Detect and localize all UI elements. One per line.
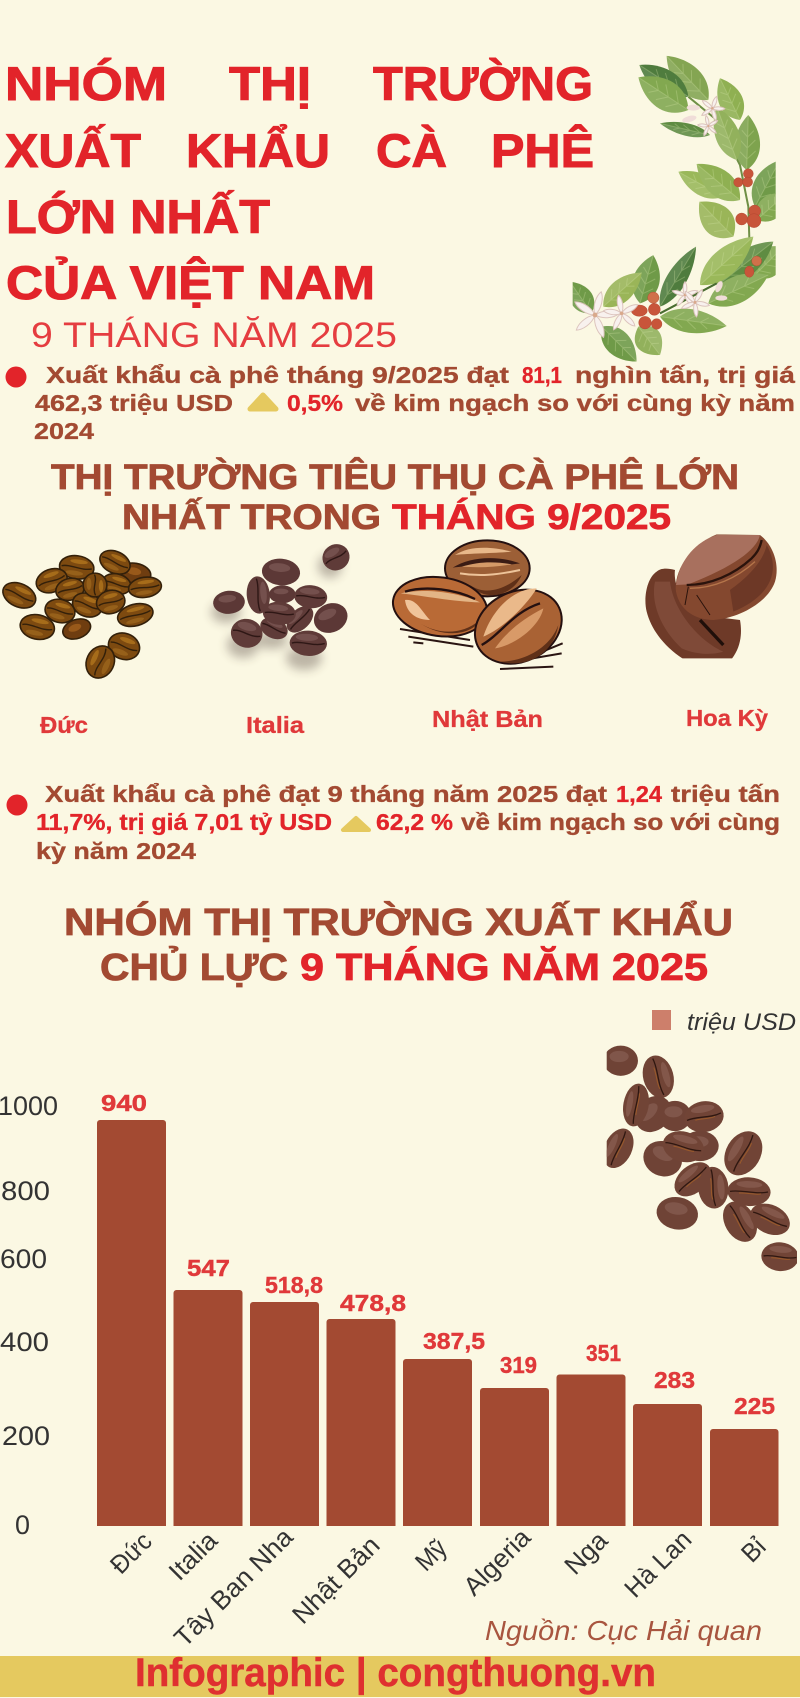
- legend: triệu USD: [687, 1009, 796, 1036]
- source note: Nguồn: Cục Hải quan: [485, 1615, 762, 1646]
- y axis labels: 800: [1, 1176, 50, 1206]
- subtitle: 9 THÁNG NĂM 2025: [31, 316, 397, 355]
- y axis labels: 600: [0, 1244, 47, 1274]
- x axis labels: Bỉ: [735, 1531, 772, 1568]
- x axis labels: Hà Lan: [618, 1524, 697, 1603]
- illustration: golden coffee beans (Đức): [0, 546, 163, 683]
- paragraph: september export summary: 0,5%: [287, 390, 343, 416]
- bullet: [6, 794, 28, 816]
- heading: main export markets: 9 THÁNG NĂM 2025: [300, 945, 708, 989]
- paragraph: nine month export summary: [6, 781, 780, 864]
- market labels: Đức: [40, 712, 88, 738]
- heading: main export markets: NHÓM THỊ TRƯỜNG XUẤT KHẨU: [64, 899, 733, 944]
- value labels: [101, 1090, 775, 1419]
- paragraph: nine month export summary: kỳ năm 2024: [36, 838, 196, 864]
- heading: largest consumer markets: [51, 457, 739, 537]
- paragraph: september export summary: 462,3 triệu USD: [35, 390, 233, 416]
- icon: up triangle: [250, 395, 276, 409]
- title: THỊ: [229, 57, 311, 110]
- paragraph: september export summary: Xuất khẩu cà phê tháng 9/2025 đạt: [46, 362, 509, 388]
- paragraph: nine month export summary: 62,2 %: [376, 809, 453, 835]
- illustration: dark coffee beans (Italia): [211, 539, 354, 670]
- title: KHẨU: [186, 124, 330, 177]
- market labels: [40, 705, 768, 738]
- x axis labels: Tây Ban Nha: [168, 1521, 299, 1653]
- title: CỦA VIỆT NAM: [6, 256, 375, 309]
- market labels: Italia: [246, 712, 304, 738]
- illustration: scattered coffee beans: [597, 1046, 800, 1273]
- paragraph: nine month export summary: 1,24: [616, 781, 662, 807]
- illustration: coffee branch wreath: [572, 56, 776, 362]
- value labels: 478,8: [340, 1290, 406, 1316]
- x axis labels: Italia: [162, 1525, 224, 1586]
- bars: [97, 1120, 778, 1526]
- heading: main export markets: [64, 899, 733, 989]
- value labels: 351: [586, 1340, 621, 1366]
- paragraph: september export summary: 81,1: [522, 362, 562, 388]
- heading: largest consumer markets: THÁNG 9/2025: [392, 497, 671, 537]
- paragraph: september export summary: về kim ngạch so với cùng kỳ năm: [355, 390, 795, 416]
- title: XUẤT: [5, 124, 141, 177]
- x axis labels: Nga: [558, 1525, 614, 1580]
- title: PHÊ: [491, 124, 594, 177]
- x axis labels: [104, 1521, 772, 1653]
- paragraph: september export summary: [6, 362, 796, 444]
- illustration: sketched coffee beans (Nhật Bản): [389, 540, 574, 677]
- paragraph: nine month export summary: triệu tấn: [671, 781, 780, 807]
- heading: largest consumer markets: THỊ TRƯỜNG TIÊU THỤ CÀ PHÊ LỚN: [51, 457, 739, 497]
- value labels: 283: [654, 1367, 695, 1393]
- title: [5, 57, 594, 309]
- title: NHÓM: [5, 57, 167, 110]
- title: CÀ: [376, 124, 447, 177]
- bar chart: [0, 1090, 778, 1653]
- title: TRƯỜNG: [373, 57, 593, 110]
- paragraph: september export summary: 2024: [34, 418, 94, 444]
- value labels: 225: [734, 1393, 775, 1419]
- paragraph: nine month export summary: Xuất khẩu cà phê đạt 9 tháng năm 2025 đạt: [45, 781, 607, 807]
- paragraph: nine month export summary: 11,7%, trị giá 7,01 tỷ USD: [36, 809, 332, 835]
- heading: largest consumer markets: NHẤT TRONG: [122, 497, 381, 537]
- value labels: 387,5: [423, 1328, 485, 1354]
- value labels: 518,8: [265, 1272, 323, 1298]
- y axis labels: 0: [15, 1510, 30, 1540]
- y axis labels: [0, 1091, 58, 1540]
- x axis labels: Mỹ: [409, 1533, 453, 1577]
- value labels: 319: [500, 1352, 537, 1378]
- y axis labels: 200: [2, 1421, 50, 1451]
- value labels: 940: [101, 1090, 147, 1116]
- market labels: Hoa Kỳ: [686, 705, 768, 731]
- illustration: large coffee bean (Hoa Kỳ): [645, 534, 777, 659]
- heading: main export markets: CHỦ LỰC: [100, 945, 288, 989]
- footer bar: [0, 1651, 800, 1697]
- x axis labels: Algeria: [457, 1522, 537, 1601]
- x axis labels: Nhật Bản: [286, 1530, 386, 1630]
- bullet: [6, 366, 26, 388]
- value labels: 547: [187, 1255, 230, 1281]
- footer bar: Infographic | congthuong.vn: [135, 1651, 656, 1695]
- icon: up triangle: [343, 818, 369, 830]
- title: LỚN NHẤT: [6, 190, 270, 243]
- market labels: Nhật Bản: [432, 706, 543, 732]
- y axis labels: 400: [0, 1327, 49, 1357]
- paragraph: september export summary: nghìn tấn, trị giá: [575, 362, 796, 388]
- paragraph: nine month export summary: về kim ngạch so với cùng: [461, 809, 780, 835]
- x axis labels: Đức: [104, 1526, 158, 1580]
